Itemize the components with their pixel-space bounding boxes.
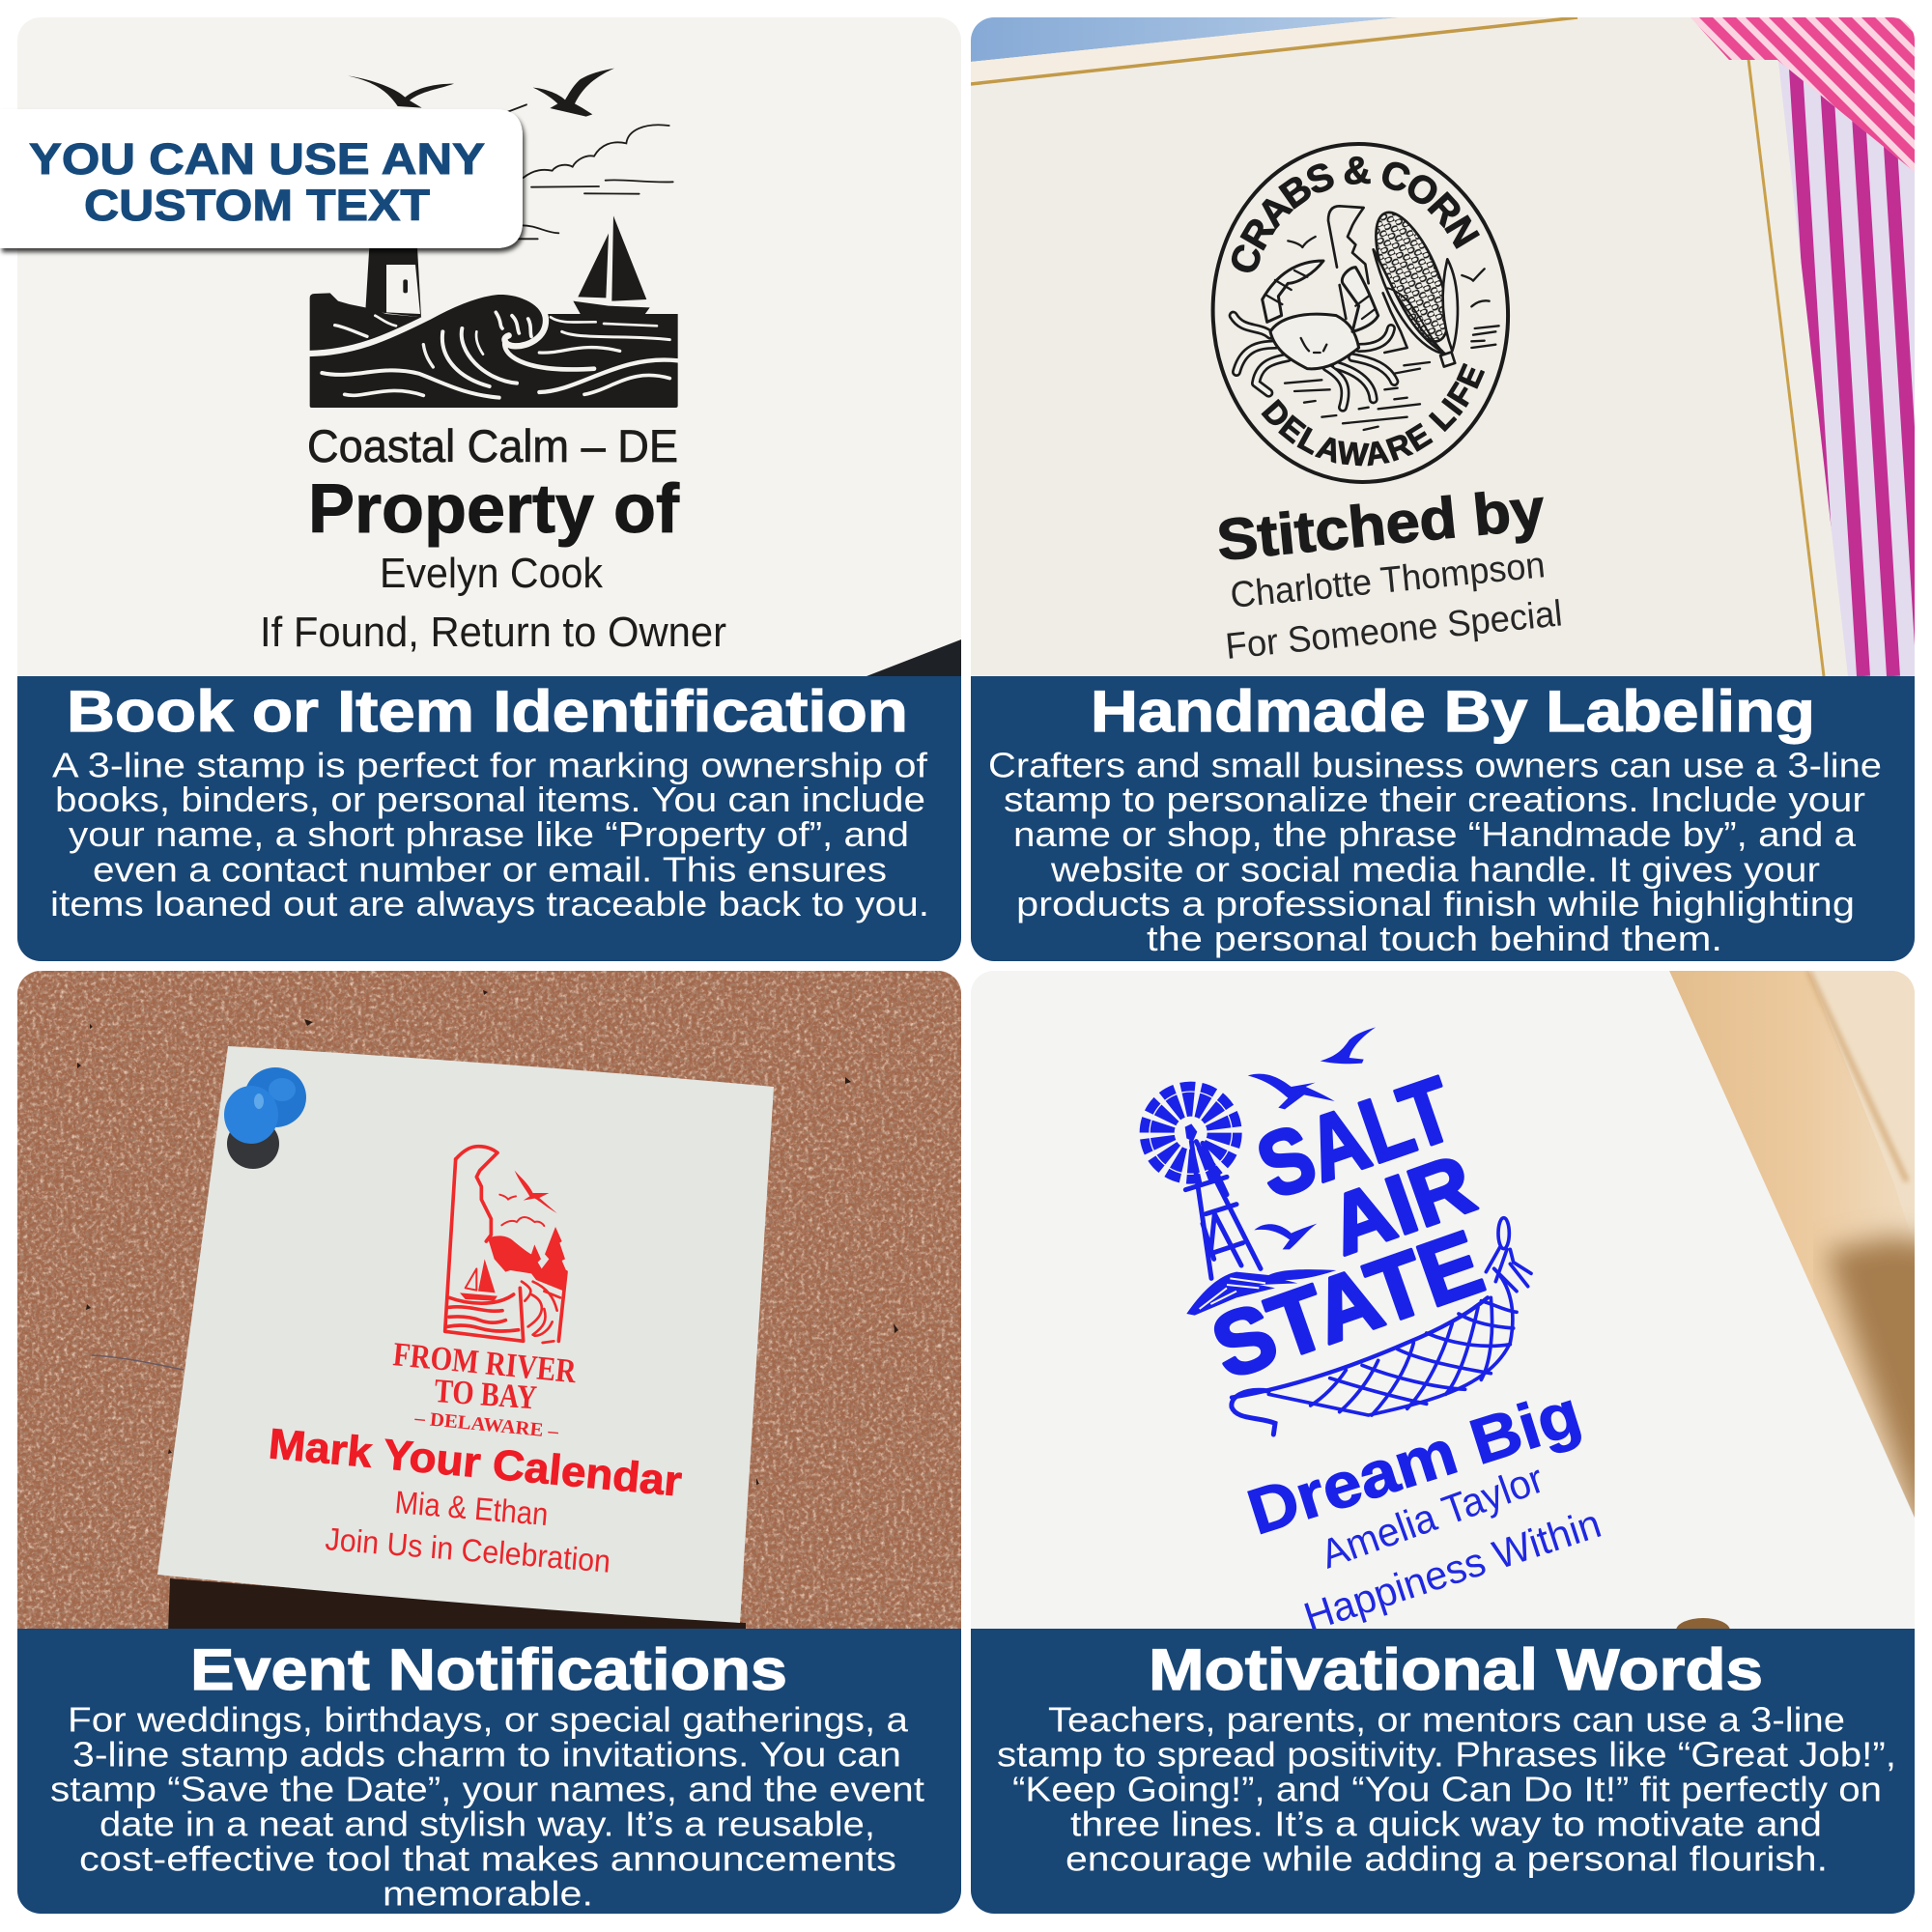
body text: books, binders, or personal items. You can include	[55, 780, 925, 819]
body text: name or shop, the phrase “Handmade by”, and a	[1013, 814, 1857, 854]
stamp title lines: STATE	[1200, 1211, 1494, 1398]
body text: encourage while adding a personal flourish.	[1065, 1839, 1828, 1878]
caption block	[971, 1629, 1915, 1914]
body text: your name, a short phrase like “Property of”, and	[69, 814, 909, 854]
icon: corn	[1372, 211, 1459, 368]
body text: stamp “Save the Date”, your names, and the event	[50, 1770, 924, 1808]
photo: stamped paper	[17, 17, 961, 684]
body text	[50, 746, 929, 923]
paper note	[157, 1046, 774, 1623]
icon: seagulls	[1321, 1027, 1376, 1064]
body text: Crafters and small business owners can use a 3-line	[988, 746, 1882, 784]
stamp line: To Bay: TO BAY	[433, 1372, 538, 1416]
stamp line: Dream Big: Dream Big	[1239, 1377, 1589, 1548]
stamp line: Delaware: – DELAWARE –	[412, 1407, 560, 1442]
stamp title lines	[1200, 1058, 1494, 1398]
stamp artwork: Salt Air State	[1150, 1027, 1531, 1435]
stamp line: Join Us: Join Us in Celebration	[324, 1520, 611, 1579]
body text: cost-effective tool that makes announcements	[79, 1839, 896, 1878]
icon: Delaware outline	[1328, 206, 1407, 353]
stamp edge in photo corner	[867, 639, 961, 676]
body text	[988, 746, 1882, 958]
stamp artwork: seascape	[309, 69, 678, 408]
stamp line: Amelia Taylor: Amelia Taylor	[1315, 1456, 1549, 1577]
body text: products a professional finish while highlighting	[1016, 884, 1855, 923]
callout badge: custom text: YOU CAN USE ANY	[29, 134, 485, 184]
body text: items loaned out are always traceable back to you.	[50, 884, 929, 923]
icon: sailboat	[611, 215, 646, 301]
panel: event notifications	[17, 971, 961, 1914]
icon: windmill	[1150, 1092, 1261, 1278]
icon: fishing net	[1232, 1218, 1531, 1435]
icon: seagull right	[533, 69, 614, 117]
body text: website or social media handle. It gives your	[1050, 850, 1820, 889]
body text: even a contact number or email. This ensures	[93, 850, 887, 889]
icon: seagull left	[348, 75, 454, 108]
body text	[997, 1700, 1896, 1878]
seal text bottom: DELAWARE LIFE	[1262, 363, 1485, 466]
stamp line: Evelyn Cook: Evelyn Cook	[380, 550, 604, 597]
panel: handmade by labeling	[971, 17, 1915, 961]
seal text top: CRABS & CORN	[1231, 156, 1480, 272]
stamp artwork: Delaware state scene	[445, 1147, 567, 1343]
stamp line: Coastal Calm: Coastal Calm – DE	[307, 420, 678, 471]
body text: three lines. It’s a quick way to motivate and	[1070, 1804, 1822, 1843]
stamp line: Mia and Ethan: Mia & Ethan	[393, 1484, 550, 1532]
callout badge: custom text: CUSTOM TEXT	[84, 181, 430, 230]
icon: waves block	[309, 292, 678, 408]
caption block	[971, 676, 1915, 961]
stamp line: Stitched by: Stitched by	[1214, 476, 1548, 573]
caption block	[17, 1629, 961, 1914]
body text: Teachers, parents, or mentors can use a 3-line	[1048, 1700, 1845, 1739]
body text: A 3-line stamp is perfect for marking ownership of	[52, 746, 928, 784]
stamp line: If Found: If Found, Return to Owner	[260, 609, 726, 656]
body text: date in a neat and stylish way. It’s a reusable,	[99, 1804, 875, 1843]
stamp line: For Someone Special: For Someone Special	[1224, 593, 1564, 668]
photo: white card on wood and burlap	[971, 971, 1932, 1643]
callout badge: custom text	[0, 109, 523, 248]
stamp line: Mark Your Calendar: Mark Your Calendar	[267, 1420, 684, 1506]
icon: lighthouse	[365, 242, 421, 317]
body text: For weddings, birthdays, or special gatherings, a	[68, 1700, 909, 1739]
heading: Event Notifications	[190, 1637, 787, 1702]
panel: motivational words	[971, 971, 1932, 1914]
icon: push pin	[224, 1067, 306, 1169]
stamp line: Happiness Within: Happiness Within	[1298, 1500, 1606, 1640]
note shadow	[168, 1578, 746, 1633]
panel: book or item identification	[17, 17, 961, 961]
caption block	[17, 676, 961, 961]
icon: clouds	[505, 104, 673, 239]
heading: Handmade By Labeling	[1091, 679, 1815, 744]
stamp line: Property of: Property of	[308, 471, 679, 548]
stamp artwork: crabs and corn seal	[1211, 142, 1511, 484]
body text: stamp to spread positivity. Phrases like “Great Job!”,	[997, 1735, 1896, 1774]
heading: Book or Item Identification	[67, 679, 908, 744]
photo: cork board	[17, 971, 961, 1637]
stamp title lines: AIR	[1318, 1138, 1486, 1273]
body text: memorable.	[383, 1874, 593, 1913]
body text: the personal touch behind them.	[1147, 919, 1722, 958]
body text	[50, 1700, 924, 1913]
body text: 3-line stamp adds charm to invitations. You can	[72, 1735, 901, 1774]
seal ring	[1205, 136, 1517, 490]
heading: Motivational Words	[1149, 1637, 1763, 1702]
icon: shoreline strokes	[1285, 237, 1499, 430]
body text: stamp to personalize their creations. Include your	[1004, 780, 1865, 819]
body text: “Keep Going!”, and “You Can Do It!” fit perfectly on	[1012, 1770, 1882, 1808]
stamp line: Charlotte Thompson: Charlotte Thompson	[1229, 545, 1547, 616]
photo: card and ribbon	[971, 0, 1932, 684]
icon: crab	[1234, 261, 1394, 408]
stamp line: From River: FROM RIVER	[391, 1335, 579, 1390]
stamp title lines: SALT	[1245, 1058, 1465, 1218]
